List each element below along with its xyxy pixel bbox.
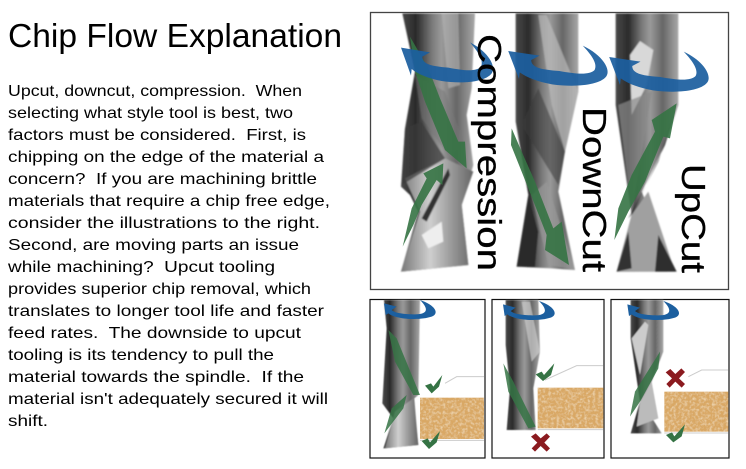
- arrow: downcut chip flow: [511, 128, 569, 265]
- text block: chip flow explanation: Upcut, downcut, compression. When: [8, 83, 302, 100]
- text block: chip flow explanation: while machining? Upcut tooling: [7, 259, 275, 276]
- icon: check: [666, 424, 685, 442]
- text block: chip flow explanation: material towards the spindle. If the: [8, 369, 304, 386]
- label: Compression: Compression: [471, 34, 508, 271]
- arrow: rotation: [627, 301, 679, 320]
- text block: chip flow explanation: concern? If you are machining brittle: [8, 171, 317, 188]
- tool: downcut: [516, 13, 578, 270]
- arrow: compression chip flow, up: [403, 163, 443, 247]
- icon: cross: [531, 433, 550, 452]
- text block: chip flow explanation: factors must be considered. First, is: [8, 127, 306, 144]
- text block: chip flow explanation: selecting what style tool is best, two: [8, 105, 293, 122]
- text block: chip flow explanation: provides superior chip removal, which: [8, 281, 311, 298]
- text block: chip flow explanation: translates to longer tool life and faster: [8, 303, 325, 320]
- panel: tool comparison: [370, 12, 728, 290]
- title: Chip Flow Explanation: [8, 17, 342, 54]
- text block: chip flow explanation: shift.: [8, 413, 48, 430]
- text block: chip flow explanation: tooling is its tendency to pull the: [8, 347, 274, 364]
- label: UpCut: UpCut: [675, 164, 712, 273]
- arrow: rotation: [503, 301, 555, 320]
- material: downcut: [538, 366, 603, 430]
- arrow: chip flow: [630, 352, 660, 417]
- arrow: downcut rotation: [508, 46, 608, 86]
- panel: compression cut result: [370, 300, 485, 458]
- tool: upcut: [616, 13, 678, 272]
- icon: check: [536, 363, 554, 381]
- icon: cross: [666, 368, 685, 388]
- arrow: upcut rotation: [609, 52, 709, 92]
- arrow: rotation: [384, 300, 436, 319]
- text block: chip flow explanation: chipping on the edge of the material a: [8, 149, 324, 166]
- arrows: chip flow: [384, 330, 420, 433]
- icon: check top: [425, 375, 442, 393]
- tool: downcut small: [506, 300, 540, 430]
- icon: check bottom: [422, 431, 440, 449]
- material: compression: [420, 377, 484, 440]
- arrow: chip flow: [503, 363, 536, 428]
- arrow: compression rotation: [401, 42, 493, 82]
- arrow: compression chip flow, down: [410, 37, 467, 168]
- tool: upcut small: [631, 300, 663, 433]
- arrow: upcut chip flow: [614, 103, 677, 240]
- text block: chip flow explanation: [7, 83, 330, 430]
- text block: chip flow explanation: Second, are moving parts an issue: [8, 237, 299, 254]
- text block: chip flow explanation: materials that require a chip free edge,: [8, 193, 330, 210]
- text block: chip flow explanation: consider the illustrations to the right.: [8, 215, 320, 232]
- tool: compression small: [382, 300, 420, 448]
- text block: chip flow explanation: material isn't adequately secured it will: [8, 391, 328, 408]
- label: DownCut: DownCut: [576, 107, 613, 272]
- tool: compression: [401, 13, 475, 272]
- material: upcut: [664, 370, 728, 433]
- panel: downcut cut result: [492, 300, 604, 458]
- panel: upcut cut result: [611, 300, 729, 458]
- text block: chip flow explanation: feed rates. The downside to upcut: [8, 325, 302, 342]
